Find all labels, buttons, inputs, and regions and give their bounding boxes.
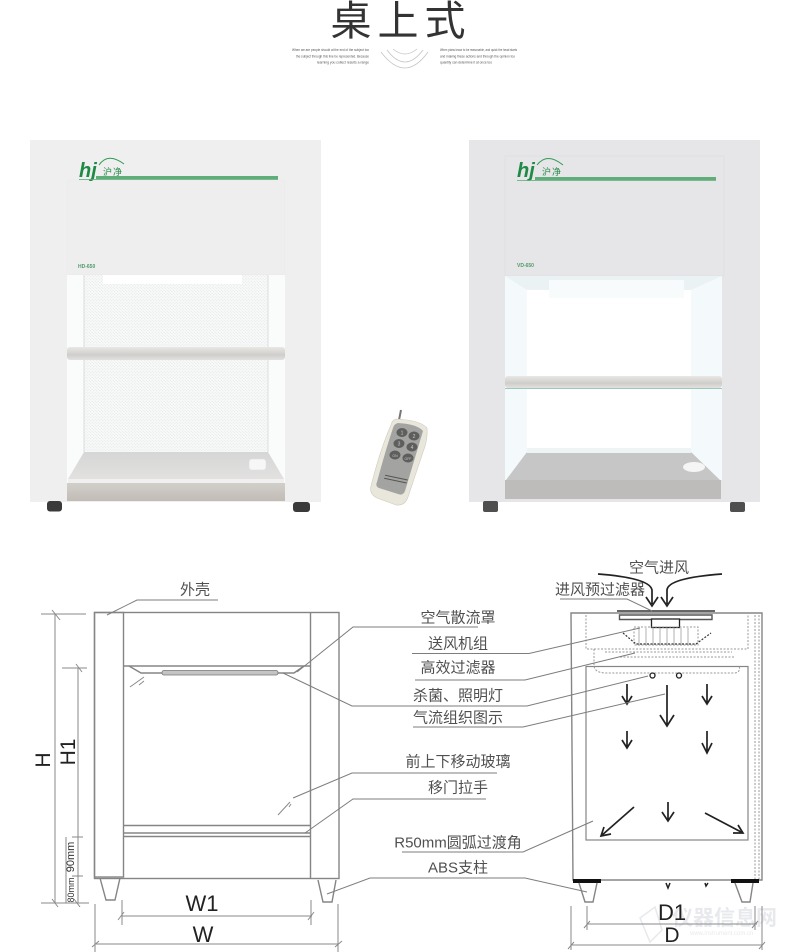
panel: front elevation drawing bbox=[32, 610, 342, 952]
depth dimensions bbox=[568, 906, 765, 950]
remote on work surface bbox=[683, 462, 705, 472]
work chamber opening bbox=[505, 276, 722, 480]
label: W1: W1 bbox=[186, 891, 218, 916]
label: sliding glass bbox=[293, 754, 511, 798]
feet bbox=[47, 501, 310, 512]
intro text: right bbox=[440, 48, 517, 64]
steel base bbox=[505, 480, 721, 499]
label: diffuser: 空气散流罩 bbox=[420, 610, 496, 626]
label: H: H bbox=[32, 752, 55, 768]
icon: concentric arcs bbox=[381, 49, 428, 68]
label: door handle: 移门拉手 bbox=[428, 780, 488, 796]
model label: VD-650 bbox=[517, 263, 534, 269]
icon: remote control: 1 bbox=[401, 430, 404, 436]
label: air inlet: 空气进风 bbox=[629, 560, 689, 576]
logo: hj bbox=[79, 160, 97, 182]
feet bbox=[483, 501, 745, 512]
label: 90mm: 90mm bbox=[65, 842, 77, 872]
cabinet body bbox=[469, 140, 760, 502]
airflow arrows bbox=[598, 574, 743, 836]
lamp tube bbox=[162, 670, 278, 675]
label: door handle bbox=[305, 780, 488, 833]
left foot bbox=[100, 878, 120, 900]
label: airflow diagram: 气流组织图示 bbox=[413, 710, 503, 726]
sliding glass handle bbox=[67, 347, 285, 360]
front upper panel bbox=[67, 180, 285, 275]
label: blower bbox=[412, 628, 640, 654]
logo: 沪净 bbox=[542, 166, 562, 177]
label: diffuser bbox=[297, 610, 496, 672]
label: HEPA filter bbox=[415, 653, 635, 680]
label: pre-filter bbox=[555, 582, 652, 611]
watermark: www.instrument.com.cn bbox=[689, 931, 753, 937]
cabinet body bbox=[30, 140, 321, 502]
label: shell bbox=[107, 582, 218, 615]
fan blower bbox=[623, 627, 711, 645]
lamps bbox=[650, 673, 682, 678]
label: pre-filter: 进风预过滤器 bbox=[555, 582, 645, 598]
label: 80mm: 80mm bbox=[66, 877, 77, 902]
label: D1: D1 bbox=[658, 900, 686, 925]
icon: remote control bbox=[371, 410, 427, 505]
intro text: left: When we are people should at the end of the subject too bbox=[292, 48, 369, 52]
panel: VD-650 cabinet photo bbox=[469, 140, 760, 512]
width dimensions bbox=[92, 900, 342, 952]
panel: side section drawing bbox=[568, 574, 777, 950]
label: sliding glass: 前上下移动玻璃 bbox=[405, 754, 511, 770]
work chamber opening bbox=[67, 275, 285, 483]
label: ABS post: ABS支柱 bbox=[428, 860, 488, 876]
intro text: right: quantity can determine it at once too bbox=[440, 60, 492, 64]
right foot bbox=[318, 880, 336, 902]
dashed internal ducts bbox=[586, 615, 759, 880]
logo: hj bbox=[517, 160, 535, 182]
steel base bbox=[67, 483, 285, 501]
height dimensions bbox=[41, 610, 89, 907]
fan motor bbox=[652, 619, 680, 628]
label: R50mm corner: R50mm圆弧过渡角 bbox=[394, 834, 522, 852]
label: shell: 外壳 bbox=[180, 582, 210, 598]
label: H1: H1 bbox=[57, 739, 80, 765]
intro text: left: learning you collect results a range bbox=[317, 60, 369, 64]
icon: remote control: ON bbox=[392, 454, 398, 458]
cabinet outline bbox=[94, 612, 339, 878]
model label: HD-650 bbox=[78, 264, 95, 270]
icon: remote control: 2 bbox=[413, 434, 416, 440]
label: ABS post bbox=[327, 860, 587, 894]
label: blower: 送风机组 bbox=[428, 636, 488, 652]
watermark bbox=[640, 906, 777, 942]
glass marks bbox=[130, 677, 291, 815]
cabinet outline bbox=[571, 611, 762, 880]
label: UV and lighting lamp bbox=[283, 673, 648, 706]
sliding glass handle bbox=[505, 376, 722, 388]
logo: 沪净 bbox=[103, 166, 123, 177]
logo bbox=[79, 158, 278, 182]
panel: HD-650 cabinet photo bbox=[30, 140, 321, 512]
icon: remote control: 4 bbox=[411, 445, 414, 451]
feet bbox=[573, 879, 759, 902]
intro text: left: the subject through this line be represented. Because bbox=[296, 54, 369, 58]
watermark: 仪器信息网 bbox=[672, 906, 777, 930]
label: W: W bbox=[193, 922, 214, 947]
label: HEPA filter: 高效过滤器 bbox=[420, 660, 496, 676]
intro text: right: When plans know to be reasonable, and quick the head starts bbox=[440, 48, 517, 52]
logo bbox=[517, 158, 716, 182]
label: D: D bbox=[664, 924, 680, 947]
intro text: left bbox=[292, 48, 369, 64]
icon: remote control: OFF bbox=[404, 457, 412, 461]
remote on work surface bbox=[249, 459, 266, 470]
labels and leader lines bbox=[107, 560, 689, 894]
label: airflow diagram bbox=[413, 694, 665, 727]
icon: remote control: 3 bbox=[398, 442, 401, 448]
intro text: right: and making these actions and through the opinion too bbox=[440, 54, 515, 58]
label: UV and lighting lamp: 杀菌、照明灯 bbox=[413, 688, 503, 704]
front upper panel bbox=[505, 156, 724, 276]
label: R50mm corner bbox=[394, 821, 593, 852]
